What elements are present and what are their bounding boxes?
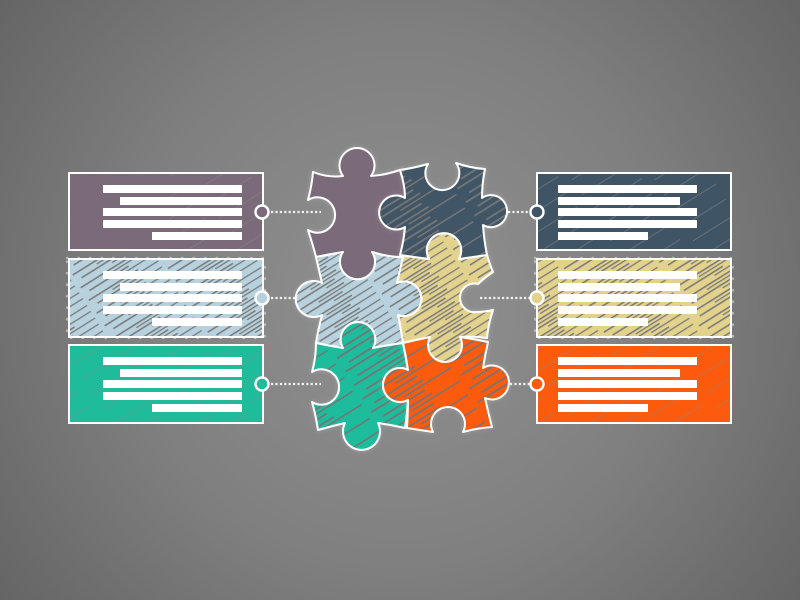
connector: bottom left	[256, 378, 321, 390]
panel: middle left	[67, 258, 265, 338]
connector: bottom right	[510, 378, 544, 390]
connector: top right	[508, 206, 544, 218]
connector: top left	[256, 206, 321, 218]
panel: top left	[69, 173, 263, 250]
panel: bottom left	[69, 345, 263, 423]
connector: middle left	[256, 292, 296, 304]
connector: middle right	[480, 292, 544, 304]
puzzle piece: light blue	[296, 252, 421, 348]
puzzle piece: mauve	[308, 148, 405, 279]
puzzle piece: teal	[312, 322, 408, 450]
puzzle piece: orange	[383, 337, 509, 432]
panel: middle right	[535, 258, 733, 338]
panel: bottom right	[537, 345, 731, 423]
puzzle piece: dark blue	[379, 163, 507, 259]
puzzle piece: yellow	[397, 233, 493, 362]
panel: top right	[537, 173, 731, 250]
